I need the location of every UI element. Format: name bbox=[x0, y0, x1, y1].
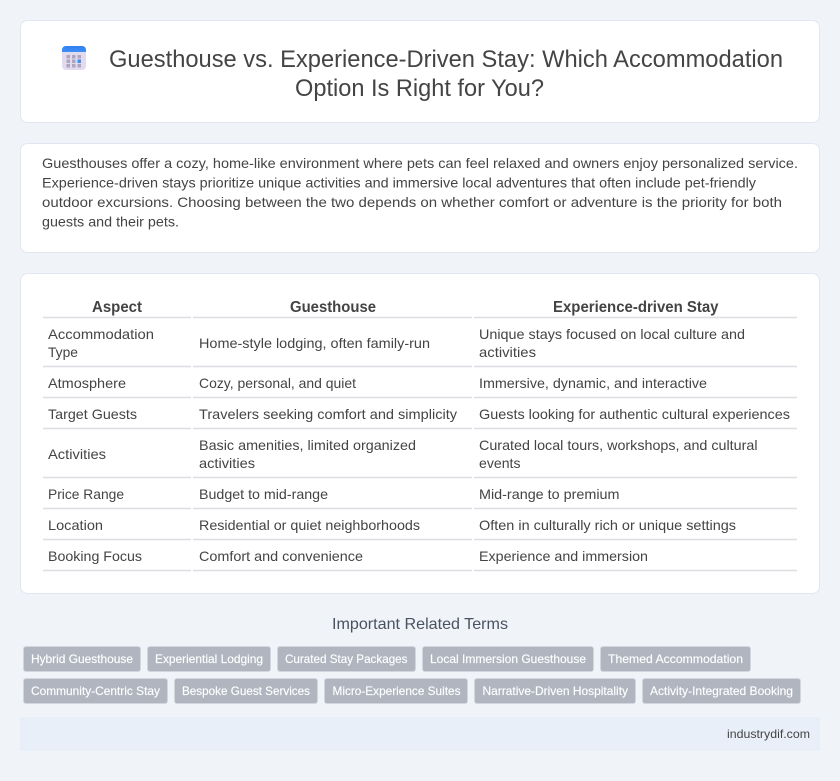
row: location: Location bbox=[48, 517, 103, 533]
tag bbox=[422, 646, 594, 672]
row: atmosphere: Cozy, personal, and quiet bbox=[199, 375, 356, 391]
table header bbox=[92, 299, 719, 316]
row: activities bbox=[48, 437, 758, 471]
text block: introduction paragraph: guests and their pets. bbox=[42, 214, 179, 230]
tag: Local Immersion Guesthouse bbox=[430, 652, 586, 666]
row: booking focus bbox=[48, 548, 648, 564]
text block: introduction paragraph: outdoor excursions. Choosing between the two depends on whether comfort or adventure is the priority for both bbox=[42, 194, 782, 210]
title: Option Is Right for You? bbox=[295, 75, 544, 102]
tag: Curated Stay Packages bbox=[285, 652, 408, 666]
tag: Narrative-Driven Hospitality bbox=[482, 684, 628, 698]
row: atmosphere: Immersive, dynamic, and interactive bbox=[479, 375, 707, 391]
row: atmosphere bbox=[48, 375, 707, 391]
tag: Hybrid Guesthouse bbox=[31, 652, 133, 666]
tag: Bespoke Guest Services bbox=[182, 684, 310, 698]
tag: Micro-Experience Suites bbox=[332, 684, 460, 698]
tag: Experiential Lodging bbox=[155, 652, 263, 666]
row: accommodation type: Type bbox=[48, 344, 78, 360]
row: activities: Basic amenities, limited organized bbox=[199, 437, 416, 453]
row: target guests: Travelers seeking comfort and simplicity bbox=[199, 406, 457, 422]
tag bbox=[642, 678, 800, 704]
tag: Activity-Integrated Booking bbox=[650, 684, 793, 698]
row: accommodation type: activities bbox=[479, 344, 536, 360]
row: booking focus: Comfort and convenience bbox=[199, 548, 363, 564]
row: price range bbox=[48, 486, 620, 502]
tag: Community-Centric Stay bbox=[31, 684, 160, 698]
text block: introduction paragraph: Guesthouses offer a cozy, home-like environment where pets can feel relaxed and owners enjoy personalized service. bbox=[42, 155, 798, 171]
row: target guests: Target Guests bbox=[48, 406, 137, 422]
row: target guests bbox=[48, 406, 790, 422]
row: accommodation type: Accommodation bbox=[48, 326, 154, 342]
row: activities: Activities bbox=[48, 446, 106, 462]
tag bbox=[24, 646, 140, 672]
tag bbox=[278, 646, 416, 672]
footer: industrydif.com bbox=[727, 727, 810, 741]
row: activities: activities bbox=[199, 455, 255, 471]
text block: introduction paragraph: Experience-driven stays prioritize unique activities and immersive local adventures that often include pet-friendly bbox=[42, 174, 756, 190]
text block: introduction paragraph bbox=[42, 155, 798, 230]
row: activities: events bbox=[479, 455, 520, 471]
panel: title card bbox=[20, 20, 820, 122]
tag bbox=[24, 678, 168, 704]
row: accommodation type: Home-style lodging, often family-run bbox=[199, 335, 430, 351]
title: Guesthouse vs. Experience-Driven Stay: Which Accommodation bbox=[109, 46, 783, 73]
tags: related terms bbox=[24, 646, 800, 704]
row: price range: Price Range bbox=[48, 486, 124, 502]
icon: calendar bbox=[62, 46, 86, 70]
row: accommodation type: Unique stays focused on local culture and bbox=[479, 326, 745, 342]
panel: comparison table bbox=[20, 274, 820, 594]
row: booking focus: Booking Focus bbox=[48, 548, 142, 564]
heading: important related terms: Important Related Terms bbox=[332, 616, 508, 633]
row: accommodation type bbox=[48, 326, 745, 360]
title bbox=[109, 46, 783, 102]
panel: introduction bbox=[20, 144, 820, 252]
table header: Experience-driven Stay bbox=[553, 299, 719, 316]
row: target guests: Guests looking for authentic cultural experiences bbox=[479, 406, 790, 422]
row: location: Residential or quiet neighborhoods bbox=[199, 517, 420, 533]
table header: Aspect bbox=[92, 299, 142, 316]
footer bbox=[20, 717, 820, 751]
tag bbox=[474, 678, 636, 704]
row: activities: Curated local tours, workshops, and cultural bbox=[479, 437, 758, 453]
tag bbox=[174, 678, 318, 704]
row: location: Often in culturally rich or unique settings bbox=[479, 517, 736, 533]
row: atmosphere: Atmosphere bbox=[48, 375, 126, 391]
tag bbox=[324, 678, 468, 704]
row: booking focus: Experience and immersion bbox=[479, 548, 648, 564]
row: price range: Budget to mid-range bbox=[199, 486, 328, 502]
tag: Themed Accommodation bbox=[608, 652, 743, 666]
table header: Guesthouse bbox=[290, 299, 376, 316]
row: price range: Mid-range to premium bbox=[479, 486, 620, 502]
tag bbox=[600, 646, 750, 672]
tag bbox=[148, 646, 270, 672]
row: location bbox=[48, 517, 736, 533]
